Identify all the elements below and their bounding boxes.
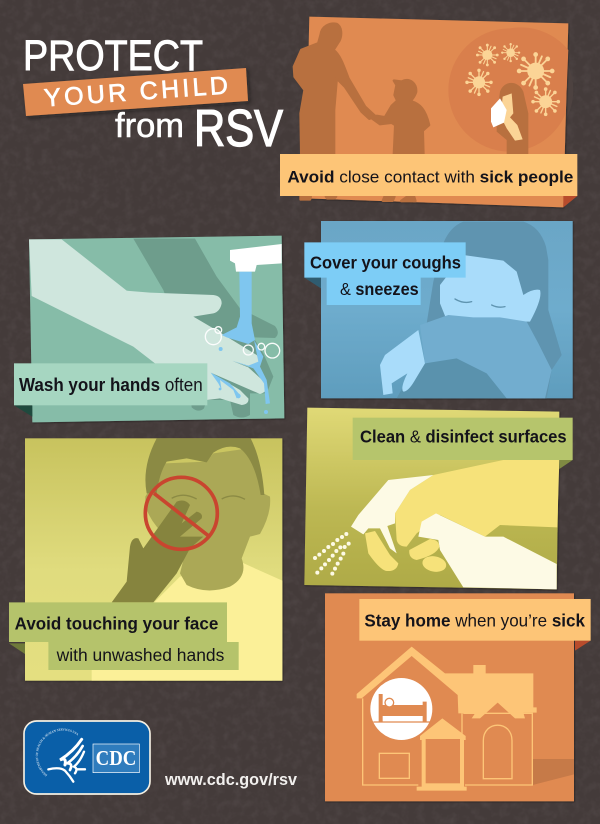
sick person (491, 83, 528, 155)
caption (9, 602, 239, 670)
house (357, 647, 537, 791)
faucet (230, 244, 282, 272)
back hand shadow (133, 239, 278, 417)
front hand (29, 239, 267, 405)
caption (14, 363, 207, 417)
title: from (115, 107, 184, 145)
caption (304, 242, 466, 305)
ground shadow (533, 759, 574, 785)
spray bottle top (351, 475, 433, 553)
neck and face (145, 448, 270, 590)
CDC box: CDC (96, 748, 136, 770)
torso (397, 357, 507, 398)
title: PROTECT (23, 32, 203, 80)
panel: stay home (325, 593, 591, 801)
title (23, 32, 283, 158)
panel: clean surfaces (304, 408, 573, 589)
fingers (365, 531, 447, 574)
logo: HHS and CDC: DEPARTMENT OF HEALTH & HUMAN SERVICES USA (36, 728, 78, 776)
panel: avoid close contact (280, 17, 577, 207)
adult silhouette (294, 24, 375, 199)
caption (280, 154, 577, 207)
caption: Avoid close contact with sick people (287, 167, 573, 186)
title: RSV (194, 100, 283, 158)
caption: Stay home when you’re sick (364, 611, 586, 631)
caption: Cover your coughs (310, 252, 461, 272)
website url: www.cdc.gov/rsv (164, 770, 298, 789)
child silhouette (371, 80, 429, 201)
panel: wash hands (14, 236, 284, 422)
hair (427, 222, 562, 398)
sleeve (420, 315, 552, 398)
spray droplets (313, 532, 351, 576)
eyebrows (172, 495, 245, 499)
hand (380, 330, 425, 395)
HHS eagle (48, 739, 85, 782)
caption: & sneezes (340, 279, 419, 299)
caption: Clean & disinfect surfaces (360, 427, 567, 447)
caption (359, 599, 591, 651)
title banner: your child: YOUR CHILD (43, 71, 229, 113)
shirt (48, 562, 282, 681)
caption: with unwashed hands (56, 645, 225, 665)
caption (353, 418, 573, 469)
bedroom icon (370, 678, 432, 740)
panel: avoid touching face (9, 438, 282, 681)
face (440, 255, 540, 322)
logo: HHS and CDC (23, 720, 151, 795)
caption: Avoid touching your face (15, 613, 218, 633)
HHS ring text (38, 731, 78, 775)
sick person circle (448, 27, 568, 152)
hair (145, 438, 264, 495)
caption: Wash your hands often (19, 374, 203, 395)
panel: cover coughs (304, 221, 573, 398)
soap bubbles (205, 327, 280, 358)
hand (112, 501, 203, 602)
water stream (211, 272, 270, 404)
prohibition sign (145, 477, 217, 549)
closed eyes (455, 299, 505, 307)
bottle body (418, 513, 557, 589)
water drops (219, 347, 268, 414)
virus icons (465, 43, 560, 116)
hand (395, 460, 559, 547)
